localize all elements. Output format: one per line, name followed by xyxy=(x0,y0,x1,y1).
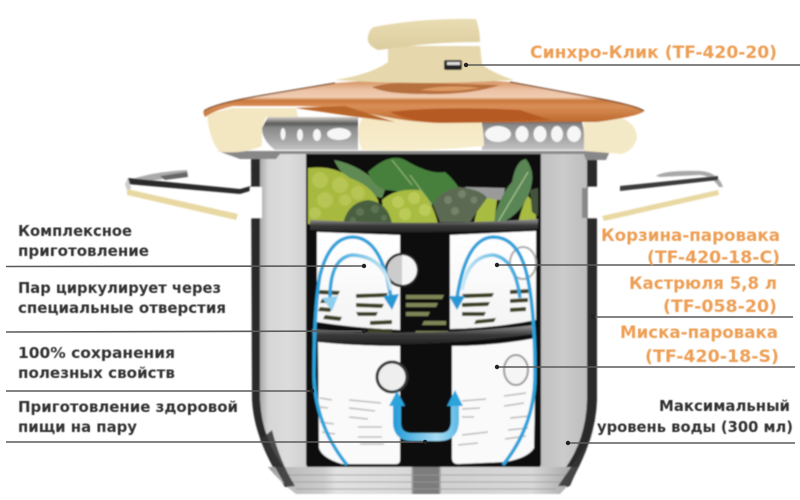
labels xyxy=(18,43,793,436)
label: pot 5.8 l xyxy=(629,274,777,317)
label: maximum water level xyxy=(597,397,793,436)
upper rivet and ring xyxy=(386,247,536,286)
Synchro-Click knob xyxy=(335,19,514,83)
label: pot 5.8 l: (TF-058-20) xyxy=(663,297,777,317)
label: steamer bowl: Миска-паровака xyxy=(620,323,778,343)
rim band right xyxy=(482,113,584,150)
label: healthy steam cooking xyxy=(18,398,238,436)
grey seat under clips xyxy=(218,151,610,160)
label: steamer basket: Корзина-паровака xyxy=(601,226,780,246)
left clip xyxy=(207,108,298,152)
label: steamer bowl xyxy=(620,323,779,367)
click button xyxy=(444,60,462,70)
label: Synchro-Click: Синхро-Клик (TF-420-20) xyxy=(530,43,777,63)
label: nutrients preserved xyxy=(18,344,175,382)
left handle xyxy=(125,170,277,220)
rising U arrow xyxy=(389,390,463,437)
label: nutrients preserved: полезных свойств xyxy=(18,364,175,382)
label: complex cooking xyxy=(18,222,149,260)
right handle xyxy=(577,171,723,221)
upper basket slots xyxy=(318,289,530,333)
rim band left xyxy=(262,117,358,150)
label: steamer basket xyxy=(601,226,780,268)
pot body xyxy=(250,153,600,494)
vegetables xyxy=(308,158,538,224)
upper basket panels xyxy=(317,231,536,330)
right clip xyxy=(584,116,637,154)
lower bowl slots xyxy=(320,393,530,445)
label: steam circulation xyxy=(18,279,226,317)
label: maximum water level: уровень воды (300 мл) xyxy=(597,418,793,436)
label: maximum water level: Максимальный xyxy=(659,397,790,415)
basket rim top xyxy=(310,219,538,232)
label: healthy steam cooking: Приготовление здоровой xyxy=(18,398,238,416)
right steam arrows xyxy=(449,237,535,465)
left steam arrows xyxy=(314,237,399,465)
label: complex cooking: приготовление xyxy=(18,242,149,260)
label: healthy steam cooking: пищи на пару xyxy=(18,418,137,436)
lower bowl panels xyxy=(318,338,536,464)
label: steamer basket: (TF-420-18-C) xyxy=(647,248,780,268)
label: steamer bowl: (TF-420-18-S) xyxy=(645,347,779,367)
centre column slots xyxy=(406,295,448,334)
centre clip xyxy=(358,115,484,150)
rim between baskets xyxy=(312,325,535,344)
label: complex cooking: Комплексное xyxy=(18,222,132,240)
label: steam circulation: специальные отверстия xyxy=(18,299,226,317)
pot base xyxy=(268,467,578,494)
label: nutrients preserved: 100% сохранения xyxy=(18,344,175,362)
steam arrows xyxy=(314,237,535,465)
illustration: steamer pot xyxy=(125,19,723,494)
leader lines xyxy=(6,63,800,445)
label: pot 5.8 l: Кастрюля 5,8 л xyxy=(629,274,777,294)
lower rings xyxy=(377,355,528,392)
glass lid xyxy=(203,79,644,123)
handle mount gaps xyxy=(250,187,600,218)
lid clips and band xyxy=(207,108,637,160)
label: steam circulation: Пар циркулирует через xyxy=(18,279,221,297)
cutaway window xyxy=(306,151,541,467)
